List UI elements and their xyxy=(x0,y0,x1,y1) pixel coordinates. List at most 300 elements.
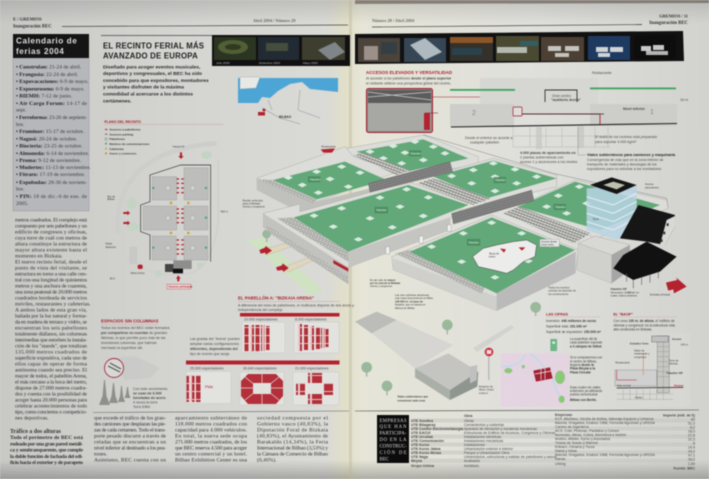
diagram: tower section: oficinas xyxy=(669,362,678,366)
building labels: Todos los recintos xyxy=(548,285,570,289)
column: UTE: Grupo Urbina xyxy=(411,464,435,468)
text block: viales subterráneos: expositores para no estorbar a los montadores xyxy=(587,167,662,171)
las cifras: LAS CIFRAS xyxy=(546,312,568,316)
title xyxy=(101,36,212,60)
panel: empresas box: BEC xyxy=(380,458,389,462)
text blocks: lower article columns: Bilbao Exhibition Center es una xyxy=(175,458,248,464)
text blocks: lower article columns: (0,46%). xyxy=(257,456,277,464)
column: UTE: UTE Kurzo Jabea xyxy=(411,447,442,451)
diagram: tower section: Estudios Torre xyxy=(630,342,649,346)
text blocks: lower article columns xyxy=(93,411,349,464)
text block: intro: concebido para que expositores, montadores xyxy=(103,78,209,84)
chart: arena seating configurations: adoptar varias configuraciones xyxy=(190,342,239,346)
text blocks: lower article columns: Diputación Foral de Bizkaia xyxy=(257,428,329,434)
city map captions: llegaría desde la xyxy=(570,363,594,367)
grey block xyxy=(577,236,630,283)
text blocks: lower article columns: celadas que se encuentran a un xyxy=(94,440,166,446)
panel: calendario de ferias 2004: • Nagusi: 20-24 de octubre. xyxy=(16,136,78,142)
text block: intro: comodidad al acercarse a los distintos xyxy=(103,92,193,98)
pavilion centre right xyxy=(433,158,557,203)
lower ramps and trees xyxy=(355,312,478,402)
panel: accesos elevados y versatilidad: ACCESOS ELEVADOS Y VERSATILIDAD xyxy=(366,70,453,75)
panel: calendario de ferias 2004: • Expobodas: 28-30 de noviem- xyxy=(16,180,87,186)
text blocks: lower article columns: Asimismo, BEC cuenta con un xyxy=(94,458,166,464)
las cifras: Inversión: 440 millones de euros xyxy=(546,319,596,323)
column: empresas: Nabal y Inbas xyxy=(555,449,577,453)
panel: calendario de ferias 2004: • Construlan: 21-24 de abril. xyxy=(16,64,82,70)
metro sign: Estación de xyxy=(479,384,493,388)
text block: intro: certámenes. xyxy=(103,98,132,104)
text block: viales subterráneos: Viales subterráneos para camiones y maquinaria xyxy=(587,153,676,157)
left page header: E / GREMIOS xyxy=(13,16,42,22)
text block: left article column: edificio de congresos y oficinas, xyxy=(15,228,88,236)
pavilion bottom: Pabellón xyxy=(469,240,480,244)
panel: calendario de ferias 2004: • BIEMH: 7-12 de junio. xyxy=(16,94,73,100)
text blocks: lower article columns: que BEC reserva 4.500 para acoger xyxy=(175,446,247,452)
column: obra: Obra xyxy=(464,414,473,418)
pavilion large left: Pabellón xyxy=(376,208,387,212)
building labels: panorámico xyxy=(645,185,659,189)
text block: left article column: acoger hasta 20.000 personas para xyxy=(15,398,88,404)
column: importe: 1,64 xyxy=(688,462,695,466)
column: UTE: UTE Naga xyxy=(411,455,429,459)
column: empresas: Urbing xyxy=(555,462,566,466)
cross-section drawing: "auditorio Arena" xyxy=(551,98,581,102)
column: importe: Importe (mill. de €) xyxy=(663,414,696,418)
panel: calendario de ferias 2004: • PIN: 18 de dic.-6 de ene. de xyxy=(16,194,88,200)
text block: left article column: altura constituye la estructura de xyxy=(15,242,88,248)
cross-section drawing: para soportar 4.000 kg/m² xyxy=(595,140,637,144)
text blocks: lower article columns: tones. xyxy=(94,452,108,458)
cross-section drawing: 1 xyxy=(650,109,654,116)
text block: left article column: nes deportivas. xyxy=(15,416,49,422)
legend: Núcleos de comunicaciones xyxy=(109,142,150,146)
photo strip left: Diciembre 2003 xyxy=(259,61,280,65)
las cifras: Superficie total: 291.000 m² xyxy=(546,324,588,328)
column: empresas: ACS, Cubi, Pinturas, Pavilabor y Cemex xyxy=(555,429,619,433)
right page header xyxy=(372,14,689,27)
black buildings xyxy=(613,205,677,288)
city map captions: Plaza Circular xyxy=(570,370,592,374)
diagram 30.640 xyxy=(240,366,284,405)
panel: empresas box: CIÓN DE xyxy=(380,450,407,456)
cross-section drawing: 4.000 plazas de aparcamiento en xyxy=(520,151,576,155)
el BAOP xyxy=(613,312,677,332)
diagram: tower section: Torre de xyxy=(669,358,679,362)
pavilion centre right: Pabellón xyxy=(495,178,506,182)
text block: left article column: encuentran los seis pabellones xyxy=(15,326,87,332)
diagram 25.000: 25.000 espectadores xyxy=(190,366,224,370)
panel: empresas box: CONSTRUC- xyxy=(380,444,407,450)
column: UTE: UTE Bitagaray xyxy=(411,423,436,427)
text block: viales subterráneos: transporte de materiales y descargas de los xyxy=(587,162,657,166)
text blocks: lower article columns: En total, la nueva sede ocupa xyxy=(175,434,248,440)
text blocks: lower article columns: 118.000 metros cuadrados con xyxy=(175,422,247,428)
column: obra xyxy=(464,414,557,468)
photo strip left: Mayo 2003 xyxy=(303,61,318,65)
plan drawing: Hacia xyxy=(105,242,113,246)
text block: left article column: compuesto por seis pabellones y un xyxy=(15,224,87,230)
text block: left article column: una zona peatonal de 20.000 metros xyxy=(15,290,87,296)
outer perimeter line xyxy=(423,135,668,208)
photo strip left xyxy=(212,35,350,66)
text block: left article column: metros y una anchura de cuarenta, xyxy=(15,284,88,290)
plan drawing: Río de xyxy=(107,194,116,198)
column: empresas xyxy=(555,413,655,466)
panel: espacios sin columnas: se usan de 6.000 xyxy=(133,392,162,396)
panel: empresas box: QUE HAN xyxy=(380,425,407,430)
panel: calendario de ferias 2004: • Expovacaciones: 6-9 de mayo. xyxy=(16,79,89,85)
text block: left article column: estructura en torno a una calle cen- xyxy=(15,272,87,278)
heading: plano del recinto xyxy=(104,120,223,124)
panel: espacios sin columnas: inversiones columnas, que habrían xyxy=(101,341,157,345)
diagram: tower section xyxy=(612,333,690,407)
las cifras: Superficie de exposición: 150.000 m² xyxy=(546,330,602,334)
diagram 8.000: 8.000 espectadores xyxy=(295,318,327,322)
legend: Pabellones xyxy=(109,137,125,141)
panel: calendario de ferias 2004: • Biocteria: 23-25 de octubre. xyxy=(16,144,83,150)
skylight streets xyxy=(353,153,591,243)
column: importe: 27,5 xyxy=(688,434,695,438)
panel: accesos elevados y versatilidad xyxy=(366,70,688,171)
city map captions: Si lo compararmos con xyxy=(570,356,603,360)
column: importe: 18,0 xyxy=(688,430,695,434)
column: importe: 51,2 xyxy=(688,422,695,426)
column: importe: 8 xyxy=(693,442,695,446)
city map captions: podría comunicarse xyxy=(570,393,598,397)
building illustration xyxy=(243,135,687,311)
pavilion bottom xyxy=(392,215,578,311)
panel: calendario de ferias 2004: bre. xyxy=(16,186,25,192)
panel: espacios sin columnas: fábricas, lo que permite poco más de las xyxy=(101,336,166,340)
pavilion top centre: Pabellón xyxy=(411,151,422,155)
cross-section drawing: Restaurante xyxy=(592,71,612,75)
column: importe: 47,1 xyxy=(688,454,695,458)
building labels: cuentan de depósito de xyxy=(548,289,576,293)
cross-section drawing: Nivel inferior xyxy=(623,107,646,111)
column: UTE: UTE Sondica xyxy=(411,419,434,423)
text block: left article column: rodeado por una gran pared metáli- xyxy=(10,442,83,448)
building labels: Arena y congresos xyxy=(370,284,393,288)
city map captions: exteriores ya utilizando xyxy=(570,389,603,393)
text block: left article column: mayor altura existente hasta el xyxy=(15,248,87,254)
column: UTE: UTE Kurzo xyxy=(411,443,430,447)
heading: el pabellón A: A diferencia del resto de pabellones, el multiusos dispone de dos arcos y xyxy=(238,304,354,308)
column: empresas: ECF, Altuñano, Vizuña de Anitúa, Idánzaja Equipos y Urbanos xyxy=(555,417,654,421)
column: obra: Parque y Urbanización Obra xyxy=(464,451,509,455)
white roof cut-away: metro xyxy=(489,255,496,259)
diagram 25.000: Pista xyxy=(205,385,213,389)
column: empresas: Tésela de Susan y Mármol xyxy=(555,441,598,445)
text block: left article column: punto de vista del visitante, se xyxy=(15,266,88,272)
text block: left article column: el más cercano a la boca del metro, xyxy=(15,380,88,386)
photo strip right xyxy=(355,31,684,64)
column: UTE: UTE EACUI xyxy=(411,431,430,435)
las cifras: La superficie útil de xyxy=(570,337,597,341)
text block: left article column: A ambos lados de esta gran vía, xyxy=(15,308,88,314)
column: obra: Cerramientos y cubiertas xyxy=(464,423,504,427)
panel: empresas box: PARTICIPA- xyxy=(380,432,407,436)
text block: intro: y visitantes disfruten de la máxima xyxy=(103,84,184,90)
plan drawing: Bilbao xyxy=(107,197,115,201)
legend xyxy=(105,128,150,156)
white roof cut-away: Acceso desde xyxy=(541,241,558,244)
column: empresas: Empresas xyxy=(555,413,572,417)
column: empresas: Aemedes, Altran, Cobra, Ibermerca e Isotrón xyxy=(555,433,626,437)
title: AVANZADO DE EUROPA xyxy=(103,52,198,60)
column: importe xyxy=(663,414,696,470)
panel: espacios sin columnas: toneladas de acero xyxy=(133,396,166,400)
text block: left article column: dispone de 27.000 metros cuadra- xyxy=(15,386,87,392)
heading: plano del recinto: PLANO DEL RECINTO xyxy=(104,120,141,124)
icon: eiffel towers xyxy=(99,380,130,405)
panel: empresas box xyxy=(355,410,699,463)
text blocks: lower article columns: Barakaldo (14,34%), la Feria xyxy=(257,438,329,446)
icon: roof sketch xyxy=(104,356,160,380)
diagram: tower section: Acceso xyxy=(674,384,684,388)
left page header: Abril 2004 / Número 28 xyxy=(253,18,296,23)
text block: intro: deportivos y congresuales, el BEC ha sido xyxy=(103,71,202,77)
panel: calendario de ferias 2004: sept. xyxy=(16,108,27,114)
text block: left article column: 135.000 metros cuadrados de xyxy=(15,350,88,356)
white roof cut-away: Boca de xyxy=(489,252,500,256)
column: obra: Acabados xyxy=(464,459,480,463)
column: importe: 24,2 xyxy=(688,450,695,454)
table: empresas xyxy=(411,413,696,470)
column: UTE: UTE Urrutiak xyxy=(411,435,433,439)
las cifras xyxy=(546,312,603,351)
panel: espacios sin columnas: por compartirse en cuentas de grandes xyxy=(101,331,167,335)
text blocks: lower article columns: Gobierno vasco (40,83%), la xyxy=(257,420,329,428)
legend: Accesos a pabellones xyxy=(109,128,141,132)
text blocks: lower article columns: Internacional de Bilbao (3,53%) y xyxy=(257,444,328,452)
pavilion top centre xyxy=(347,135,478,175)
text block: left article column: móviles, restaurantes y cafeterías. xyxy=(15,300,91,308)
text block: left article column: autónoma cuando sea preciso. El xyxy=(15,368,87,374)
text block: left article column: la doble función de fachada del edi- xyxy=(10,454,83,460)
city map captions: Esas cuatro sin calles xyxy=(570,385,601,389)
panel: calendario de ferias 2004: • Fitraro: 17-19 de noviembre. xyxy=(16,172,86,178)
diagram: tower section: Pabellón VIP xyxy=(667,371,683,375)
photo strip left: Julio 2003 xyxy=(216,61,230,65)
text block: left article column: Todo el perímetro de BEC está xyxy=(10,435,83,441)
panel: calendario de ferias 2004: • Mudertec: 11-13 de noviembre. xyxy=(16,165,92,171)
white roof cut-away: zona metro xyxy=(541,244,554,247)
pavilion right: Pabellón xyxy=(555,205,566,209)
building labels: Las seis cubiertas atraviesan xyxy=(395,293,430,297)
text block: left article column: ca y semitransparente, que cumple xyxy=(10,448,84,454)
diagram: tower section: 100 m xyxy=(681,342,689,346)
panel: calendario de ferias 2004: Calendario de xyxy=(16,36,77,46)
text blocks: lower article columns: aparcamiento subterráneo de xyxy=(175,416,248,422)
pavilion right xyxy=(518,180,668,238)
text block: left article column: da en madera de terrazo y vidrio, se xyxy=(15,320,88,326)
lower ramps and trees: Viales subterráneos que xyxy=(397,395,428,399)
cross-section drawing: cualquier pabellón xyxy=(470,140,499,144)
city map captions: Plaza Moyúa a la xyxy=(570,367,595,371)
covered bridges xyxy=(368,162,534,224)
column: UTE: UTE Comfer Electrometalurgia xyxy=(411,427,464,431)
column: obra: Aparatos de elevación y escaleras mecánicas xyxy=(464,427,537,431)
plan drawing: Santurtzi xyxy=(105,245,116,249)
el BAOP: EL "BAOP" xyxy=(613,312,633,316)
panel: espacios sin columnas: ESPACIOS SIN COLUMNAS xyxy=(101,318,159,324)
text block: left article column xyxy=(10,218,91,466)
green strip and entrance ramps xyxy=(247,230,323,295)
building labels: Acceso xyxy=(645,182,654,186)
city map captions: el centro de Bilbao, xyxy=(570,359,597,363)
text blocks: lower article columns: nivel inferior al destinado a los pea- xyxy=(94,444,166,452)
city map xyxy=(501,353,568,407)
panel: empresas box: EMPRESAS xyxy=(380,419,407,424)
legend: Accesos parking xyxy=(109,132,133,136)
column: empresas: Balzola, Dragados, Ezaboz 1988, Ferrovial Agroman y URSSA xyxy=(555,421,655,425)
panel: espacios sin columnas: 4 veces la torre xyxy=(133,400,158,404)
pavilion large left xyxy=(263,182,468,284)
panel: espacios sin columnas xyxy=(99,318,170,409)
blue tower xyxy=(587,177,637,240)
text block: left article column: totalmente diáfanos, sin columnas xyxy=(15,330,87,338)
building labels: España, que es básica en xyxy=(395,303,426,307)
text block: left article column: cuadrados bordeada de servicios xyxy=(15,296,87,302)
left page header xyxy=(13,16,348,30)
heading: el pabellón A: EL PABELLÓN A: "BIZKAIA ARENA" xyxy=(238,296,314,300)
building labels: para el Bizkaia xyxy=(243,201,261,205)
diagram 10.000 xyxy=(242,318,285,353)
diagram: tower section: restaurante y xyxy=(634,352,650,356)
panel: accesos elevados y versatilidad: Al acceder a los pabellones desde el plano superior xyxy=(366,76,452,80)
cross-section drawing: 2 plantas subterráneas con xyxy=(520,156,563,160)
plan drawing: Hacia A-8 xyxy=(173,144,185,148)
right page header: Número 28 / Abril 2004 xyxy=(372,18,415,23)
column: importe: 39,2 xyxy=(688,458,695,462)
panel: espacios sin columnas: mermado la superficie útil. xyxy=(101,346,143,350)
cross-section drawing: Gran centro xyxy=(552,94,571,98)
text block: left article column: dos y cuenta con la posibilidad de xyxy=(15,392,88,398)
text block: left article column: metros cuadrados. El complejo está xyxy=(15,218,88,224)
building labels: Recibir vehículos xyxy=(243,198,264,202)
building labels: cuatro vídeos distintos xyxy=(611,294,638,298)
text blocks: lower article columns: la Cámara de Comercio de Bilbao xyxy=(257,452,328,458)
text block: left article column: mayor de todos, el pabellón Arena, xyxy=(15,374,88,380)
right page header: GREMIOS / 11 xyxy=(659,14,688,18)
title: EL RECINTO FERIAL MÁS xyxy=(103,42,204,50)
las cifras: a 3 campos de fútbol. xyxy=(570,344,602,348)
text blocks: lower article columns: que excede el tráfico de los gran- xyxy=(94,414,166,422)
panel: calendario de ferias 2004: • Almoneda: 6-14 de noviembre. xyxy=(16,151,90,157)
building labels: una masa bioconstruirá en Bilbo xyxy=(395,296,433,300)
diagram 21.000: 21.000 espectadores xyxy=(295,366,329,370)
text block: left article column: El nuevo recinto ferial, desde el xyxy=(15,258,87,266)
column: UTE: Meysa xyxy=(411,459,423,463)
column: obra: Instalaciones xyxy=(464,443,485,447)
diagram: tower section: Salón de xyxy=(634,348,645,352)
text blocks: lower article columns: 271.000 metros cuadrados, de los xyxy=(175,440,247,446)
pavilion top left: Pabellón xyxy=(310,177,321,181)
column: importe: 8,2 xyxy=(690,426,695,430)
diagram: tower section: Sala central xyxy=(617,384,631,388)
text block: left article column: tipo, como conciertos o competicio- xyxy=(15,410,87,416)
panel: empresas box: DO EN LA xyxy=(380,438,407,443)
heading: el pabellón A: independencia del complejo xyxy=(238,308,283,312)
text block: viales subterráneos xyxy=(578,127,676,171)
column: UTE xyxy=(411,419,464,468)
text block: intro xyxy=(103,64,209,104)
plan drawing: Acceso principal xyxy=(168,285,192,289)
left page header: Inauguración BEC xyxy=(13,24,52,30)
column: obra: Urbanización, estructuras y salidas de pabellones y aseos xyxy=(464,455,557,459)
arrow: main entrance xyxy=(666,277,687,293)
cross-section drawing: El suelo de los recintos está preparado xyxy=(595,135,657,139)
diagram 21.000 xyxy=(293,366,339,405)
diagram: tower section: congresos xyxy=(634,355,647,359)
pavilion top left xyxy=(257,147,393,213)
panel: calendario de ferias 2004: bre. xyxy=(16,122,25,128)
diagram 10.000: 10.000 espectadores xyxy=(244,318,278,322)
text block: left article column: tral con una longitud de quinientos xyxy=(15,278,87,284)
text block: left article column: Tráfico a dos alturas xyxy=(10,429,62,435)
column: empresas: Andino, Albilán, Kymo y Asociados xyxy=(555,437,610,441)
arrow: top entrance xyxy=(321,144,336,153)
panel: accesos elevados y versatilidad: el visitante obtiene una perspectiva global del recinto. xyxy=(366,82,451,86)
text block: left article column: cuya torre de cuál con metros de xyxy=(15,236,88,242)
panel: espacios sin columnas: Con este vencimiento xyxy=(133,387,168,391)
text blocks: lower article columns: capacidad para 4.000 vehículos. xyxy=(175,428,248,434)
text block: left article column: superficie expositiva, cada uno de xyxy=(15,354,88,362)
column: obra: Obras xyxy=(464,419,474,423)
city map captions: Bilbao con Berlín. xyxy=(570,398,597,402)
column: empresas: Carnes de Ingeniería xyxy=(555,425,589,429)
legend: Aseos y comercios xyxy=(109,152,137,156)
column: obra: Urbanización exterior e interior xyxy=(464,447,514,451)
diagram 8.000 xyxy=(294,318,339,353)
plan drawing: Metro Ansio xyxy=(131,271,145,275)
diagram: tower section: Acceso xyxy=(672,337,682,341)
diagram 30.640: 30.640 espectadores xyxy=(243,366,277,370)
building labels: Pabellón VIP xyxy=(611,287,627,291)
map of Bizkaia: BILBAO xyxy=(279,115,292,119)
arrow: top entrance: Restaurante xyxy=(321,144,336,148)
text blocks: lower article columns: des camiones que desplazan las pie- xyxy=(94,422,166,428)
text blocks: lower article columns: (40,83%), el Ayuntamiento de xyxy=(257,432,329,440)
cross-section drawing: 16 m xyxy=(680,98,688,102)
site plan xyxy=(104,120,229,289)
panel: espacios sin columnas: Todos los recintos del BEC están formados xyxy=(101,326,170,330)
column: importe: 22,3 xyxy=(688,438,695,442)
column: obra: Instalaciones eléctricas xyxy=(464,435,501,439)
text blocks: lower article columns: sociedad compuesta por el xyxy=(257,416,328,422)
text block: left article column: celebrar acontecimientos de todo xyxy=(15,404,87,410)
las cifras: cada pabellón equivale xyxy=(570,341,603,345)
building labels: los constructores xyxy=(548,292,569,296)
panel: calendario de ferias 2004: 2005. xyxy=(16,201,29,207)
white roof cut-away xyxy=(473,239,559,273)
building labels: Entrada principal xyxy=(650,293,670,297)
column: empresas: Balzola, Dragados, Ezaboz 1988, Ferrovial Agroman y URSSA xyxy=(555,453,655,457)
panel: calendario de ferias 2004: • Frangosia: 22-24 de abril. xyxy=(16,72,79,78)
text block: left article column: bañada por la luz natural y forma- xyxy=(15,312,87,320)
panel: espacios sin columnas: Torre Eiffel xyxy=(133,405,150,409)
right page header: Inauguración BEC xyxy=(649,21,689,26)
city map captions xyxy=(570,356,603,402)
chart: arena seating configurations xyxy=(186,313,340,405)
panel: calendario de ferias 2004: • Air Cargo Forum: 14-17 de xyxy=(16,101,88,107)
building labels: Es tan sólo de mayor xyxy=(370,278,396,282)
heading: el pabellón A xyxy=(238,296,354,312)
legend: Cafeterías xyxy=(109,147,124,151)
column: empresas: Eriksen, Cimarra y Turza xyxy=(555,445,595,449)
text block: left article column: intermedias que estorben la instala- xyxy=(15,338,87,344)
